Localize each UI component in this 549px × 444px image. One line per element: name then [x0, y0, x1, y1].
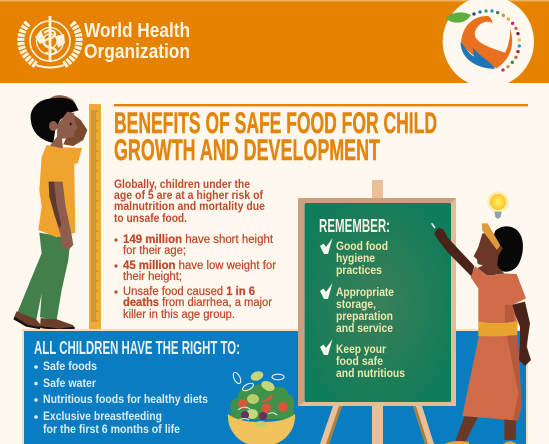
rights list: Safe water	[43, 378, 96, 390]
chalk	[431, 223, 436, 228]
remember list: storage,	[336, 299, 376, 311]
easel	[320, 180, 434, 444]
statistics list: for their age;	[123, 245, 186, 257]
chalkboard frame	[298, 198, 456, 406]
eye	[70, 122, 72, 126]
statistics list: deaths from diarrhea, a major	[123, 297, 272, 309]
WHO wordmark: World Health	[84, 20, 190, 42]
dress skirt	[462, 335, 522, 421]
back arm	[511, 302, 531, 366]
pants	[17, 233, 71, 322]
remember list: and nutritious	[336, 368, 405, 380]
intro text: malnutrition and mortality due	[114, 201, 265, 213]
intro text: to unsafe food.	[114, 213, 187, 225]
ear	[49, 121, 58, 131]
header band	[0, 0, 549, 83]
panel: rights	[22, 329, 528, 444]
remember list: hygiene	[336, 253, 375, 265]
bowl	[228, 414, 295, 444]
WHO emblem	[21, 16, 79, 68]
hand on head	[50, 95, 74, 104]
intro text: age of 5 are at a higher risk of	[114, 190, 263, 202]
hair	[493, 226, 523, 272]
sleeve	[63, 147, 82, 165]
feet and sandals	[14, 311, 74, 331]
flying food pieces	[232, 370, 284, 393]
logo: food safety heart	[443, 0, 534, 87]
remember list: food safe	[336, 356, 383, 368]
salad greens	[230, 384, 296, 419]
intro text	[114, 179, 265, 225]
rights list	[34, 361, 208, 436]
girl pointing at board	[431, 223, 531, 444]
statistics list: Unsafe food caused 1 in 6	[123, 286, 255, 298]
remember list	[320, 238, 405, 380]
hair	[31, 98, 79, 143]
raised arm	[434, 228, 474, 277]
icon: light bulb	[487, 191, 509, 219]
legs	[455, 415, 516, 442]
rights heading: ALL CHILDREN HAVE THE RIGHT TO:	[34, 337, 240, 358]
top rule	[114, 104, 528, 106]
chalkboard surface	[304, 203, 451, 402]
rights list: Nutritious foods for healthy diets	[43, 394, 208, 406]
title: GROWTH AND DEVELOPMENT	[114, 134, 380, 167]
rights list: Safe foods	[43, 361, 97, 373]
remember list: Good food	[336, 241, 388, 253]
WHO wordmark: Organization	[84, 41, 190, 63]
remember list: practices	[336, 265, 382, 277]
rights list: for the first 6 months of life	[43, 424, 180, 436]
belt	[478, 321, 518, 336]
shoes	[444, 441, 517, 444]
statistics list: killer in this age group.	[123, 309, 235, 321]
dress top	[471, 266, 526, 323]
remember list: Keep your	[336, 344, 386, 356]
remember list: preparation	[336, 311, 393, 323]
ruler	[89, 104, 101, 330]
icon: check marks	[320, 238, 332, 355]
raised forearm behind head	[63, 115, 87, 146]
statistics list	[114, 234, 276, 321]
arm	[49, 182, 73, 250]
intro text: Globally, children under the	[114, 179, 250, 191]
WHO wordmark	[84, 20, 190, 63]
neck and face	[50, 112, 78, 149]
icon: ring of coloured dots	[472, 9, 521, 72]
remember list: Appropriate	[336, 287, 394, 299]
boy standing against ruler	[13, 95, 87, 331]
icon: blue hand	[461, 42, 495, 69]
rights list: Exclusive breastfeeding	[43, 411, 162, 423]
statistics list: their height;	[123, 271, 182, 283]
shirt	[38, 145, 75, 237]
icon: salad bowl	[228, 370, 296, 444]
face and neck	[474, 233, 504, 276]
statistics list: 45 million have low weight for	[123, 260, 276, 272]
remember list: and service	[336, 323, 393, 335]
remember heading: REMEMBER:	[319, 215, 390, 236]
icon: leaf	[446, 12, 471, 23]
title	[114, 107, 437, 167]
icon: orange heart ring	[461, 16, 512, 68]
headband	[482, 223, 500, 250]
statistics list: 149 million have short height	[123, 234, 274, 246]
